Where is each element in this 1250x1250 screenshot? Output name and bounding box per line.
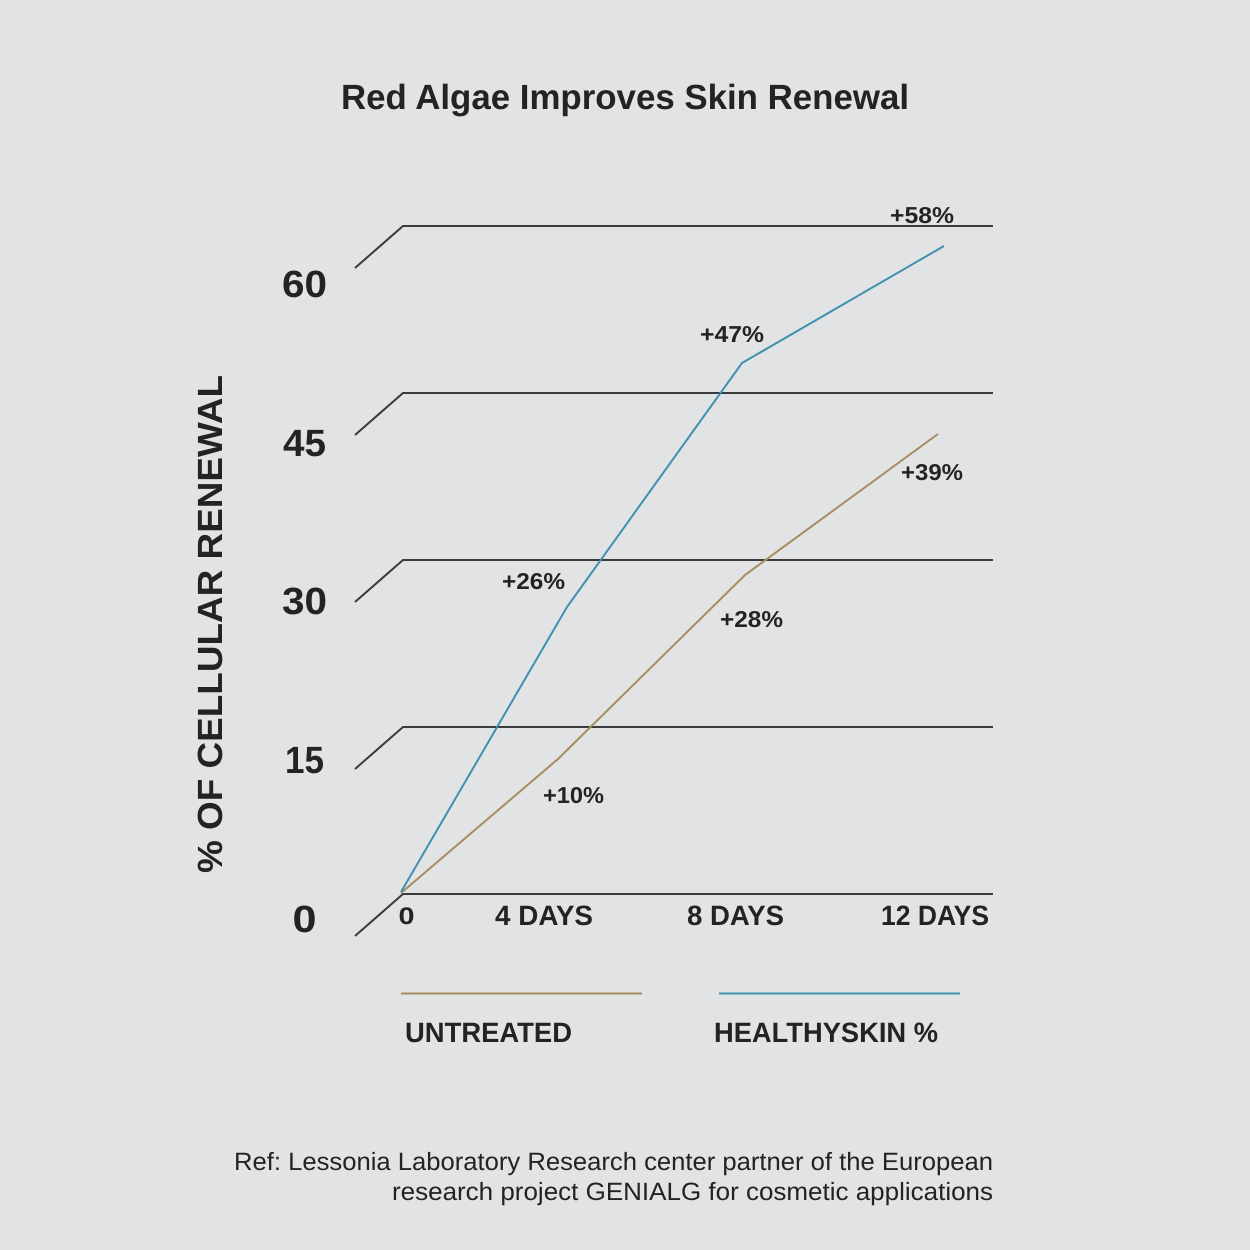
data labels [502, 202, 963, 808]
x axis labels: 12 DAYS [881, 900, 989, 931]
legend: healthyskin: HEALTHYSKIN % [714, 1017, 938, 1048]
y axis title: % OF CELLULAR RENEWAL [191, 375, 230, 873]
untreated line [401, 434, 938, 893]
legend [401, 994, 960, 1048]
data labels: +10% [543, 782, 604, 808]
title: Red Algae Improves Skin Renewal [341, 78, 909, 117]
y axis labels: 0 [292, 899, 316, 941]
y axis labels: 45 [283, 423, 326, 465]
reference note [234, 1148, 993, 1206]
legend: untreated: UNTREATED [405, 1017, 572, 1048]
data labels: +58% [890, 202, 954, 228]
y axis labels [282, 264, 327, 941]
x axis labels: 0 [398, 903, 414, 930]
reference note: research project GENIALG for cosmetic applications [392, 1178, 993, 1206]
data labels: +28% [720, 606, 783, 632]
y axis labels: 30 [282, 581, 327, 623]
healthyskin line [401, 246, 944, 892]
chart [191, 202, 993, 941]
data labels: +47% [700, 321, 764, 347]
grid lines [355, 226, 993, 936]
y axis labels: 60 [282, 264, 327, 306]
x axis labels [398, 900, 989, 931]
data labels: +39% [901, 459, 963, 485]
x axis labels: 4 DAYS [495, 900, 593, 931]
reference note: Ref: Lessonia Laboratory Research center partner of the European [234, 1148, 993, 1176]
x axis labels: 8 DAYS [687, 900, 784, 931]
y axis labels: 15 [285, 740, 324, 782]
data labels: +26% [502, 568, 565, 594]
